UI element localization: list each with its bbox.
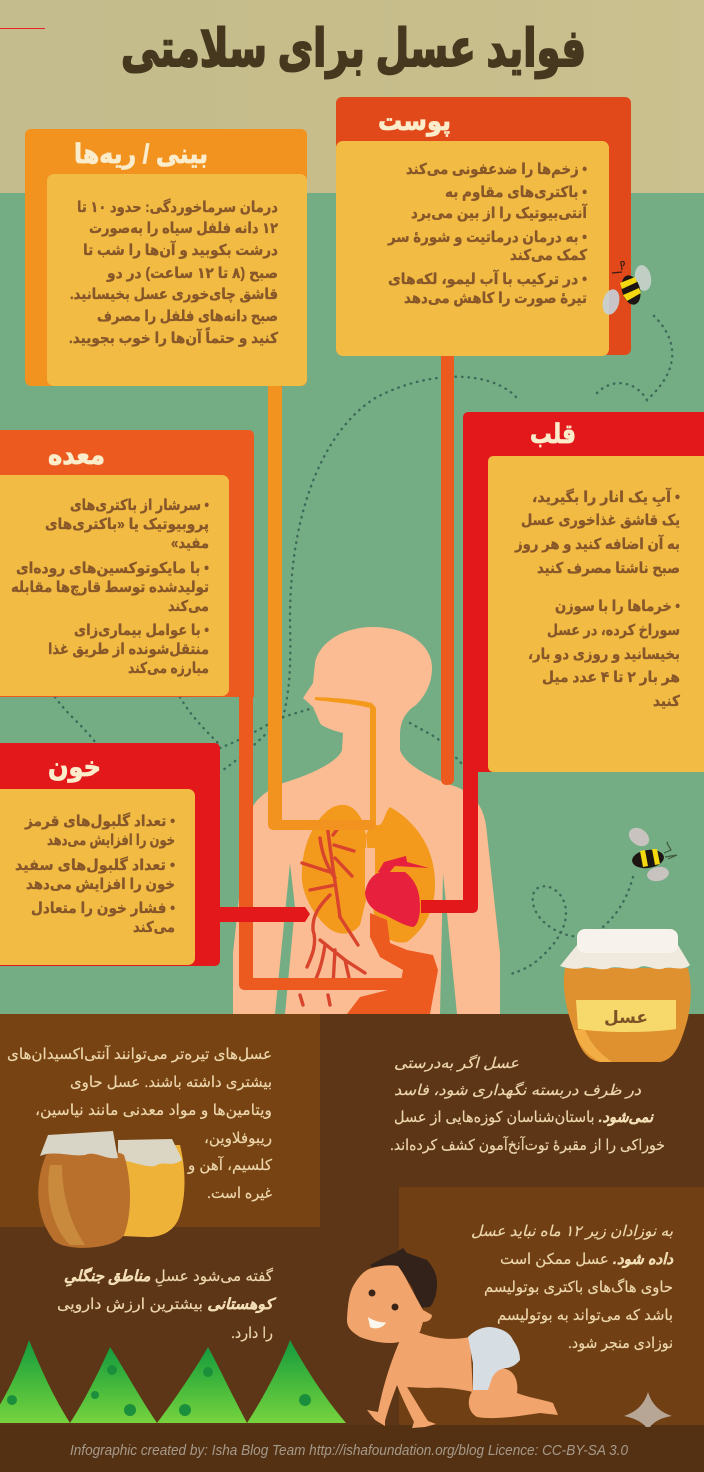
text: heart remedies: [514, 488, 680, 710]
text: infants warning: نوزادی منجر شود.: [568, 1335, 673, 1352]
heart vessels: [378, 856, 429, 874]
text: skin benefits: • در ترکیب با آب لیمو، لکه‌های: [388, 270, 587, 288]
text: stomach benefits: • با مایکوتوکسین‌های روده‌ای: [16, 560, 209, 577]
text: nose and lungs remedy: درمان سرماخوردگی: حدود ۱۰ تا: [77, 198, 278, 216]
text: stomach benefits: منتقل‌شونده از طریق غذا: [48, 641, 209, 658]
text: skin benefits: [387, 161, 588, 307]
panel: stomach: [0, 430, 254, 697]
text: blood benefits: • تعداد گلبول‌های سفید: [15, 856, 175, 874]
text: heart remedies: هر بار ۲ تا ۴ عدد میل: [542, 669, 680, 686]
text: skin benefits: آنتی‌بیوتیک را از بین می‌برد: [411, 204, 588, 222]
stomach: [347, 913, 438, 1014]
text: nose and lungs remedy: قاشق چای‌خوری عسل بخیسانید.: [70, 286, 278, 304]
text: heart remedies: بخیسانید و روزی دو بار،: [528, 646, 680, 663]
baby smile: [368, 1317, 386, 1328]
baby eyes: [368, 1290, 376, 1296]
text: nose and lungs remedy: صبح دانه‌های فلفل را مصرف: [97, 308, 278, 325]
text: skin benefits: • به درمان درماتیت و شورهٔ سر: [387, 229, 587, 246]
text: blood benefits: خون را افزایش می‌دهد: [26, 876, 175, 893]
text: stomach benefits: [11, 497, 209, 677]
text: heart remedies: یک قاشق غذاخوری عسل: [521, 512, 680, 529]
text: skin benefits: تیرهٔ صورت را کاهش می‌دهد: [404, 290, 587, 307]
heading: skin: پوست: [378, 106, 451, 137]
text: infants warning: به نوزادان زیر ۱۲ ماه نباید عسل: [471, 1223, 673, 1240]
icon: two honey jars: [38, 1131, 185, 1248]
heading: stomach: معده: [48, 440, 105, 470]
baby body and limbs: [367, 1330, 473, 1428]
icon: bee near skin panel: [600, 261, 653, 317]
illustration: human body: [233, 627, 500, 1014]
heading: nose and lungs: بینی / ریه‌ها: [74, 139, 208, 170]
connector: blood to panel: [215, 907, 310, 922]
lungs: [302, 805, 435, 943]
text: nose and lungs remedy: صبح (۸ تا ۱۲ ساعت) در دو: [106, 265, 278, 282]
text: blood benefits: می‌کند: [133, 919, 175, 936]
text: stomach benefits: مفید»: [171, 535, 209, 552]
text: heart remedies: به آن اضافه کنید و هر روز: [514, 535, 680, 553]
panel: nose and lungs: [25, 129, 307, 386]
icon: crawling baby: [347, 1248, 558, 1428]
text: nose and lungs remedy: درشت بکوبید و آن‌ها را شب تا: [83, 241, 278, 259]
icon: green mountains: [0, 1340, 346, 1423]
icon: honey jar: [560, 929, 691, 1062]
connector: heart to panel: [421, 770, 478, 913]
text: skin benefits: • زخم‌ها را ضدعفونی می‌کند: [406, 161, 587, 178]
panel: skin: [336, 97, 631, 356]
connector: skin to panel: [441, 350, 454, 785]
baby hair: [370, 1248, 437, 1308]
text: blood benefits: • تعداد گلبول‌های قرمز: [24, 812, 175, 830]
text: dark honey antioxidants: [7, 1045, 273, 1202]
text: dark honey antioxidants: ریبوفلاوین،: [204, 1130, 272, 1147]
text: nose and lungs remedy: ۱۲ دانه فلفل سیاه را به‌صورت: [89, 220, 278, 237]
text: heart remedies: • آبِ یک انار را بگیرید،: [532, 488, 680, 508]
text: honey does not spoil: خوراکی را از مقبرهٔ توت‌آنخ‌آمون کشف کرده‌اند.: [390, 1136, 665, 1154]
text: forest honey: [57, 1267, 277, 1342]
connector: stomach to panel: [239, 690, 405, 990]
text: dark honey antioxidants: کلسیم، آهن و: [187, 1156, 273, 1174]
text: stomach benefits: مبارزه می‌کند: [128, 660, 209, 677]
text: infants warning: باشد که می‌تواند به بوتولیسم: [497, 1307, 673, 1324]
text: heart remedies: • خرماها را با سوزن: [555, 598, 680, 615]
text: heart remedies: کنید: [653, 693, 680, 710]
text: infants warning: حاوی هاگ‌های باکتری بوتولیسم: [484, 1278, 673, 1296]
footer credit: Infographic created by: Isha Blog Team http://ishafoundation.org/blog Licence: CC-BY-SA 3.0: [70, 1442, 629, 1459]
trachea: [315, 697, 376, 828]
heart: [365, 872, 420, 927]
text: honey does not spoil: نمی‌شود. باستان‌شناسان کوزه‌هایی از عسل: [394, 1109, 654, 1126]
text: forest honey: کوهستانی بیشترین ارزش دارویی: [57, 1296, 277, 1313]
text: dark honey antioxidants: بیشتری داشته باشند. عسل حاوی: [70, 1074, 272, 1091]
body silhouette: [233, 627, 500, 1014]
jar lid: [577, 929, 678, 953]
text: dark honey antioxidants: غیره است.: [207, 1185, 272, 1202]
text: infants warning: داده شود. عسل ممکن است: [500, 1251, 674, 1268]
icon: star ornament: [624, 1392, 672, 1427]
text: skin benefits: • باکتری‌های مقاوم به: [445, 184, 587, 201]
text: stomach benefits: • با عوامل بیماری‌زای: [74, 622, 209, 639]
heading: blood: خون: [48, 752, 101, 783]
text: stomach benefits: تولیدشده توسط قارچ‌ها مقابله: [11, 579, 209, 596]
text: skin benefits: کمک می‌کند: [510, 247, 587, 264]
bronchial tree: [300, 823, 365, 1005]
icon: honey jar: عسل: [604, 1008, 648, 1027]
text: forest honey: گفته می‌شود عسلِ مناطق جنگلیِ: [64, 1267, 274, 1287]
heading: heart: قلب: [530, 419, 576, 449]
diaper: [468, 1327, 520, 1390]
text: stomach benefits: می‌کند: [168, 598, 209, 615]
text: nose and lungs remedy: [69, 198, 278, 347]
text: heart remedies: سوراخ کرده، در عسل: [547, 622, 680, 639]
panel: heart: [463, 412, 704, 772]
text: infants warning: [471, 1223, 674, 1352]
connector: nose and lungs to panel: [268, 380, 375, 830]
text: stomach benefits: • سرشار از باکتری‌های: [70, 497, 209, 514]
panel: blood: [0, 743, 220, 966]
arm gaps: [275, 863, 457, 1014]
text: honey does not spoil: عسل اگر به‌درستی: [394, 1054, 519, 1072]
text: blood benefits: • فشار خون را متعادل: [31, 900, 175, 917]
text: blood benefits: خون را افزایش می‌دهد: [47, 832, 175, 849]
text: heart remedies: صبح ناشتا مصرف کنید: [537, 560, 680, 577]
jar label: [576, 1000, 676, 1032]
text: forest honey: را دارد.: [231, 1325, 273, 1342]
text: nose and lungs remedy: کنید و حتماً آن‌ها را خوب بجویید.: [69, 327, 278, 347]
text: honey does not spoil: در ظرف دربسته نگهداری شود، فاسد: [394, 1081, 641, 1099]
icon: bee above jar: [625, 824, 677, 883]
baby head: [347, 1265, 432, 1343]
text: blood benefits: [15, 812, 175, 936]
text: dark honey antioxidants: عسل‌های تیره‌تر می‌توانند آنتی‌اکسیدان‌های: [7, 1045, 272, 1063]
text: dark honey antioxidants: ویتامین‌ها و مواد معدنی مانند نیاسین،: [35, 1102, 272, 1119]
text: stomach benefits: پروبیوتیک یا «باکتری‌های: [45, 516, 209, 534]
decorative dotted flight paths: [55, 313, 672, 975]
jar cloth: [560, 945, 690, 969]
text: honey does not spoil: [390, 1054, 665, 1154]
